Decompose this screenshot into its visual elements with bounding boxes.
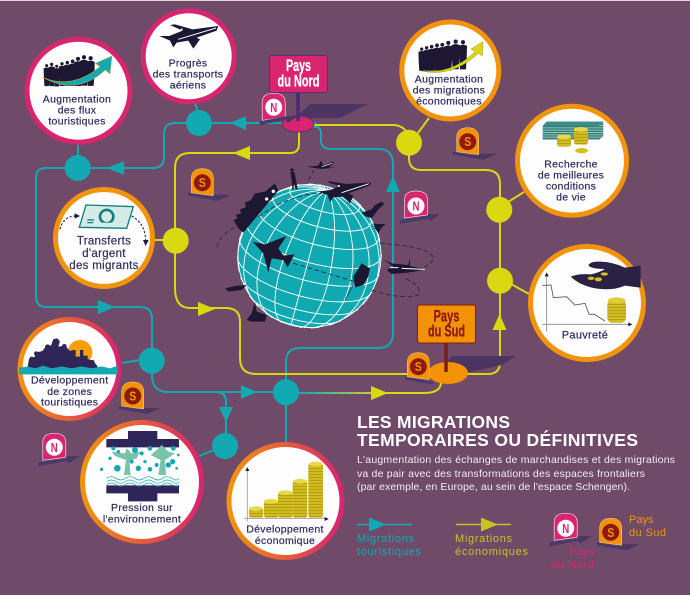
panel: Progrès des transports aériens bbox=[143, 11, 234, 102]
legend: tourist migrations: touristiques bbox=[357, 546, 422, 558]
marker S (Pays du Sud sign) bbox=[405, 353, 433, 385]
panel: Augmentation des flux touristiques: des flux bbox=[58, 104, 97, 116]
globe silhouettes: planes, ships, travellers bbox=[217, 161, 433, 322]
network: tourist migration lines bbox=[36, 103, 393, 456]
panel: Développement de zones touristiques: Développement bbox=[31, 374, 108, 386]
icon: crowd with yellow arrow bbox=[418, 40, 483, 72]
panel: Augmentation des flux touristiques: touristiques bbox=[48, 116, 106, 128]
marker N (lower left): N bbox=[51, 440, 58, 455]
legend: Pays du Sud: du Sud bbox=[629, 527, 666, 539]
icon: growing coin stacks bbox=[244, 462, 329, 522]
panel: Augmentation des flux touristiques bbox=[27, 39, 130, 142]
sign: Pays du Nord bbox=[270, 56, 368, 132]
marker N (Pays du Nord sign) bbox=[260, 93, 298, 125]
marker S (lower left): S bbox=[129, 388, 136, 404]
legend: Pays du Nord: N bbox=[562, 521, 569, 536]
panel: Développement économique: économique bbox=[255, 535, 315, 547]
legend: Pays du Sud bbox=[597, 514, 666, 550]
panel: Augmentation des migrations économiques bbox=[402, 22, 499, 119]
panel: Pauvreté: Pauvreté bbox=[562, 330, 608, 342]
marker N (right of globe): N bbox=[412, 198, 420, 214]
arrows: tourist migrations bbox=[98, 116, 400, 422]
icon: airplane bbox=[159, 24, 218, 49]
legend: economic migrations bbox=[455, 518, 528, 558]
text block: introduction: (par exemple, en Europe, au sein de l'espace Schengen). bbox=[357, 481, 630, 493]
panel: Pression sur l'environnement bbox=[82, 422, 202, 542]
icon: banknote with dashed arrows bbox=[60, 205, 149, 246]
icon: press squeezing the environment bbox=[100, 431, 180, 501]
panel: Recherche de meilleures conditions de vie: Recherche bbox=[544, 158, 598, 170]
text block: introduction: L'augmentation des échanges de marchandises et des migrations bbox=[357, 454, 675, 466]
icon: money bundle and coins bbox=[543, 122, 603, 153]
sign: Pays du Nord: du Nord bbox=[278, 72, 320, 90]
legend: Pays du Sud: Pays bbox=[629, 514, 654, 526]
panel: Transferts d'argent des migrants: Transferts bbox=[77, 236, 131, 248]
legend: Pays du Nord: Pays bbox=[570, 546, 594, 558]
panel: Pression sur l'environnement: l'environnement bbox=[103, 513, 181, 525]
network nodes bbox=[65, 110, 513, 459]
legend: tourist migrations bbox=[357, 518, 422, 558]
legend: Pays du Nord: du Nord bbox=[551, 559, 594, 571]
marker N (lower left) bbox=[38, 433, 80, 466]
marker N (right of globe) bbox=[400, 191, 440, 224]
panel: Développement économique bbox=[229, 444, 342, 558]
network: economic migration lines bbox=[155, 118, 529, 393]
icon: hand, falling curve and coins bbox=[542, 262, 641, 332]
marker S (left of globe) bbox=[188, 169, 231, 201]
icon: island with sun bbox=[19, 338, 118, 374]
panel: Pression sur l'environnement: Pression sur bbox=[111, 502, 173, 514]
arrows: economic migrations bbox=[198, 146, 506, 400]
globe bbox=[200, 142, 425, 350]
panel: Transferts d'argent des migrants bbox=[56, 190, 152, 286]
marker S (Pays du Sud sign): S bbox=[415, 359, 422, 374]
panel: Recherche de meilleures conditions de vie: de vie bbox=[556, 192, 586, 204]
legend: economic migrations: économiques bbox=[455, 546, 528, 558]
panel: Transferts d'argent des migrants: d'argent bbox=[82, 248, 126, 260]
marker S (upper right): S bbox=[464, 134, 471, 149]
panel: Progrès des transports aériens: aériens bbox=[170, 80, 206, 92]
marker S (lower left) bbox=[119, 382, 161, 414]
text block: introduction bbox=[357, 454, 675, 493]
text block: introduction: va de pair avec des transformations des espaces frontaliers bbox=[357, 468, 645, 480]
title: LES MIGRATIONS bbox=[357, 412, 510, 432]
legend: economic migrations: Migrations bbox=[455, 533, 512, 545]
marker S (upper right) bbox=[453, 128, 497, 160]
legend: tourist migrations: Migrations bbox=[357, 533, 414, 545]
panel: Augmentation des flux touristiques: Augmentation bbox=[43, 94, 111, 106]
panel: Développement de zones touristiques: touristiques bbox=[41, 397, 98, 409]
marker S (left of globe): S bbox=[199, 175, 206, 190]
panel: Recherche de meilleures conditions de vie bbox=[518, 106, 626, 215]
sign: Pays du Nord: Pays bbox=[286, 56, 311, 75]
panel: Augmentation des migrations économiques: Augmentation bbox=[415, 74, 483, 86]
legend: Pays du Sud: S bbox=[607, 525, 614, 540]
sign: Pays du Sud bbox=[418, 305, 516, 384]
panel: Transferts d'argent des migrants: des migrants bbox=[69, 260, 139, 272]
panel: Pauvreté bbox=[530, 246, 644, 360]
sign: Pays du Sud: Pays bbox=[434, 307, 460, 326]
panel: Progrès des transports aériens: Progrès bbox=[169, 58, 207, 70]
panel: Progrès des transports aériens: des transports bbox=[153, 69, 223, 81]
panel: Développement économique: Développement bbox=[246, 524, 324, 536]
panel: Recherche de meilleures conditions de vie: conditions bbox=[546, 181, 596, 193]
panel: Augmentation des migrations économiques: des migrations bbox=[413, 84, 485, 96]
panel: Recherche de meilleures conditions de vie: de meilleures bbox=[538, 170, 604, 182]
panel: Développement de zones touristiques: de zones bbox=[47, 386, 92, 398]
sign: Pays du Sud: du Sud bbox=[428, 322, 465, 340]
marker N (Pays du Nord sign): N bbox=[270, 100, 277, 115]
panel: Augmentation des migrations économiques: économiques bbox=[416, 96, 482, 108]
title bbox=[357, 412, 638, 450]
title: TEMPORAIRES OU DÉFINITIVES bbox=[357, 429, 638, 450]
legend: Pays du Nord bbox=[550, 513, 594, 571]
icon: crowd with rising arrow bbox=[43, 55, 112, 87]
panel: Développement de zones touristiques bbox=[19, 320, 119, 418]
